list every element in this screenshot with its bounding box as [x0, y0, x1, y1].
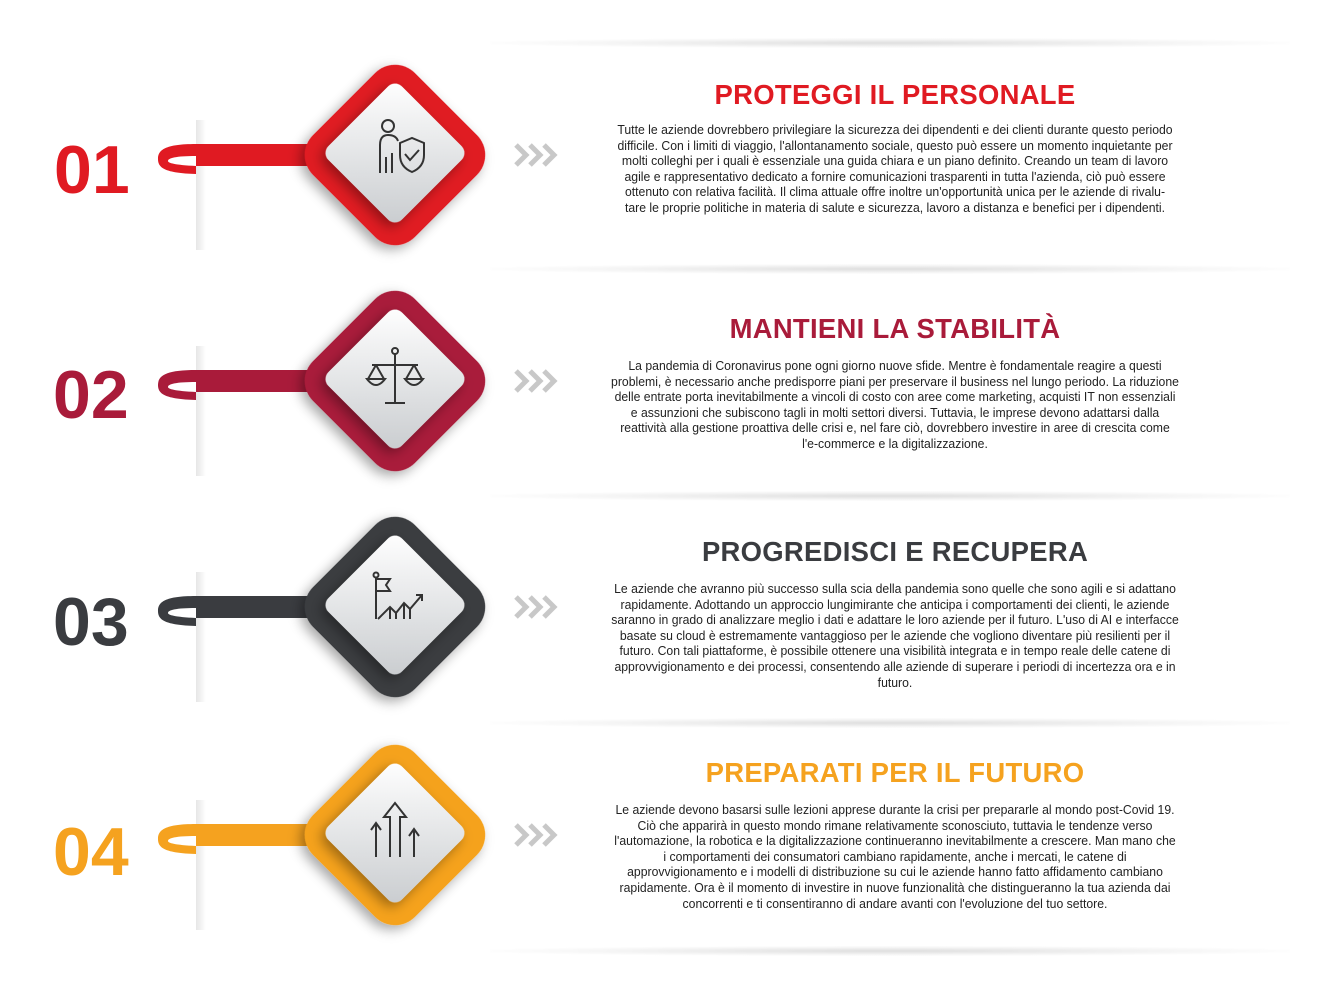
text 4: approvvigionamento e i modelli di distribuzione su cui le aziende hanno fatto affidamento cambiano — [627, 864, 1163, 879]
text 3: basate su cloud è estremamente vantaggioso per le aziende che vogliono diventare più resilienti per il — [620, 628, 1170, 643]
row 1 graphic — [158, 53, 554, 257]
text 3 — [611, 581, 1179, 690]
text 4: rapidamente. Ora è il momento di investire in nuove funzionalità che distingueranno la tua azienda dai — [620, 880, 1170, 895]
icon: flag chart — [374, 572, 422, 619]
number 04: 04 — [53, 814, 129, 890]
row 4 graphic — [158, 733, 554, 937]
text 2: problemi, è necessario anche predisporre piani per preservare il business nel lungo periodo. La riduzione — [611, 374, 1179, 389]
text 4 — [614, 802, 1176, 911]
left graphics — [53, 62, 558, 936]
arrows — [516, 825, 554, 845]
text 3: futuro. Con tali piattaforme, è possibile ottenere una visibilità integrata e in tempo reale delle catene di — [620, 643, 1170, 658]
text 4: Le aziende devono basarsi sulle lezioni apprese durante la crisi per prepararle al mondo post-Covid 19. — [615, 802, 1175, 817]
icon: person shield — [380, 120, 424, 173]
icon: up arrows — [371, 803, 419, 857]
heading 3: PROGREDISCI E RECUPERA — [702, 536, 1088, 567]
text 1 — [617, 122, 1173, 215]
text 3: saranno in grado di analizzare meglio i dati e adattare le loro aziende per il futuro. L'uso di AI e interfacce — [611, 612, 1179, 627]
text 1: Tutte le aziende dovrebbero privilegiare la sicurezza dei dipendenti e dei clienti durante questo periodo — [617, 122, 1173, 137]
icon: scales — [367, 348, 423, 403]
text 1: ottenuto con relativa facilità. Il clima attuale offre inoltre un'opportunità unica per le aziende di rivalu- — [625, 184, 1165, 199]
text 1: difficile. Con i limiti di viaggio, l'allontanamento sociale, questo può essere un momento inquietante per — [617, 138, 1173, 153]
heading 4: PREPARATI PER IL FUTURO — [706, 757, 1084, 788]
text 4: Ciò che apparirà in questo mondo rimane relativamente sconosciuto, tuttavia le tendenze verso — [638, 818, 1152, 833]
heading 1: PROTEGGI IL PERSONALE — [715, 79, 1075, 110]
text 1: molti colleghi per i quali è essenziale una guida chiara e un piano definito. Creando un team di lavoro — [622, 153, 1168, 168]
text 2 — [611, 358, 1179, 451]
text 4: concorrenti e ti consentiranno di andare avanti con l'evoluzione del tuo settore. — [683, 896, 1107, 911]
text 3: futuro. — [878, 675, 912, 690]
text 2: reattività alla gestione proattiva delle crisi e, nel fare ciò, dovrebbero investire in aree di crescita come — [620, 420, 1170, 435]
arrows — [516, 371, 554, 391]
text 3: rapidamente. Adottando un approccio lungimirante che anticipa i comportamenti dei clienti, le aziende — [621, 597, 1169, 612]
text 2: delle entrate porta inevitabilmente a vincoli di costo con aree come marketing, acquisti IT non essenziali — [615, 389, 1175, 404]
row 3 graphic — [158, 505, 554, 709]
text 4: l'automazione, la robotica e la digitalizzazione continueranno inevitabilmente a crescere. Man mano che — [614, 833, 1176, 848]
text 2: La pandemia di Coronavirus pone ogni giorno nuove sfide. Mentre è fondamentale reagire a questi — [628, 358, 1162, 373]
text 2: l'e-commerce e la digitalizzazione. — [802, 436, 988, 451]
text 1: agile e rappresentativo dedicato a fornire comunicazioni trasparenti in tutta l'azienda, ciò può essere — [624, 169, 1165, 184]
text 3: Le aziende che avranno più successo sulla scia della pandemia sono quelle che sono agili e si adattano — [614, 581, 1176, 596]
arrows — [516, 597, 554, 617]
number 02: 02 — [53, 357, 129, 433]
text 1: tare le proprie politiche in materia di salute e sicurezza, lavoro a distanza e benefici per i dipendenti. — [625, 200, 1165, 215]
text 3: approvvigionamento e dei processi, consentendo alle aziende di superare i periodi di incertezza ora e in — [614, 659, 1176, 674]
text 4: i comportamenti dei consumatori cambiano rapidamente, anche i mercati, le catene di — [663, 849, 1127, 864]
number 03: 03 — [53, 584, 129, 660]
heading 2: MANTIENI LA STABILITÀ — [730, 313, 1060, 344]
row 2 graphic — [158, 279, 554, 483]
text 2: e assunzioni che subiscono tagli in molti settori diversi. Tuttavia, le imprese devono adattarsi dalla — [631, 405, 1159, 420]
arrows — [516, 145, 554, 165]
number 01: 01 — [54, 132, 130, 208]
